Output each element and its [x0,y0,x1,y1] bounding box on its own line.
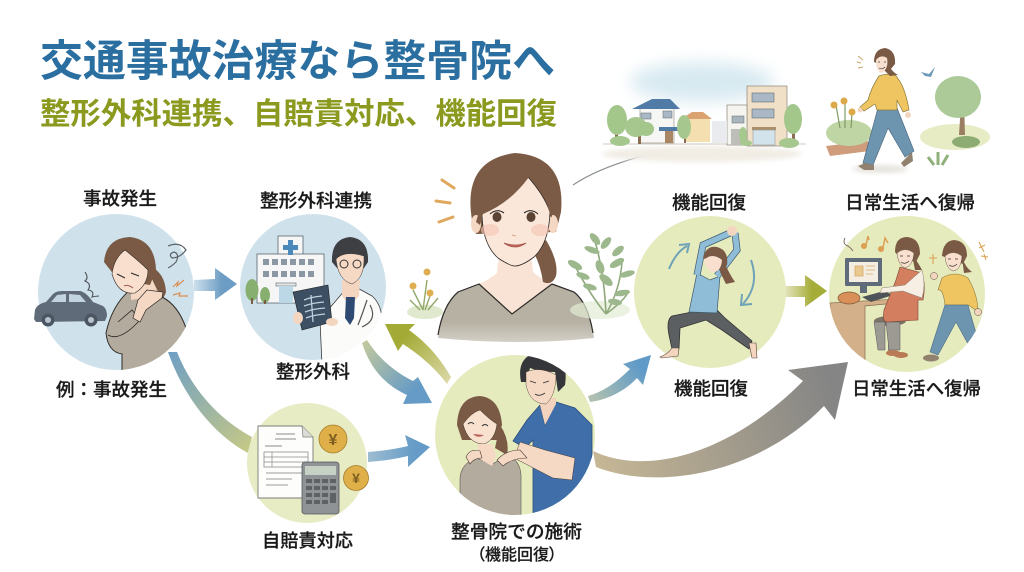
panel: accident [34,214,194,376]
label: return top: 日常生活へ復帰 [845,192,975,213]
illustration: smiling woman [438,153,594,342]
sparkle marks beside woman [436,180,454,222]
illustration: flowers [407,268,443,319]
panel: treatment [435,351,595,520]
panel: orthopedics [240,214,386,365]
arrow: treatment to woman [385,324,451,384]
label: recovery bottom: 機能回復 [674,378,748,399]
icon: calculator [302,462,339,514]
illustration: green plant [566,231,636,319]
panel: daily life [829,216,988,375]
label: function recovery note: （機能回復） [477,546,557,564]
icon: impact squiggle [85,272,99,297]
figure: doctor with x-ray [293,237,383,365]
arrow: accident to insurance [168,352,252,453]
icon: swirl mark [844,238,853,251]
label: orthopedics: 整形外科 [276,361,350,382]
panel: recovery [634,216,786,368]
arrow: insurance to treatment [368,435,430,467]
icon: document [258,426,313,498]
illustration: walking woman in garden [826,48,990,173]
label: treatment: 整骨院での施術 [451,521,582,542]
arrow: recovery to daily life [785,275,827,307]
scene: woman at desk and walking woman [830,237,982,362]
arrow: orthopedics to treatment [362,340,432,404]
illustration: town scene [602,62,806,162]
arrow: accident to orthopedics [194,268,237,300]
subtitle: 整形外科連携、自賠責対応、機能回復 [40,97,557,131]
icon: yen coin large: ¥ [329,432,338,449]
icon: dizzy swirl [168,244,186,268]
figure: therapist and patient [457,351,592,520]
label: recovery top: 機能回復 [672,192,746,213]
icon: downward motion arrow [741,260,754,305]
figure: woman with neck pain [104,237,190,376]
panel: insurance [247,403,368,523]
icon: hospital building [246,236,324,304]
label: return bottom: 日常生活へ復帰 [852,378,981,399]
icon: car [34,291,107,326]
icon: sparkles [929,242,988,264]
label: orthopedics link top: 整形外科連携 [260,190,372,211]
figure: stretching woman [660,226,757,358]
icon: pain marks [173,280,188,296]
arrow: treatment to recovery [588,355,651,402]
label: insurance: 自賠責対応 [262,530,353,551]
label: example accident: 例：事故発生 [56,379,167,400]
label: accident top: 事故発生 [83,188,157,209]
icon: music notes [862,236,888,251]
thin curve from woman to town [573,152,657,185]
arrow: treatment to daily life [593,362,848,477]
title: 交通事故治療なら整骨院へ [40,38,555,86]
icon: upward motion arrow [669,244,689,269]
icon: yen coin small: ¥ [352,470,360,486]
